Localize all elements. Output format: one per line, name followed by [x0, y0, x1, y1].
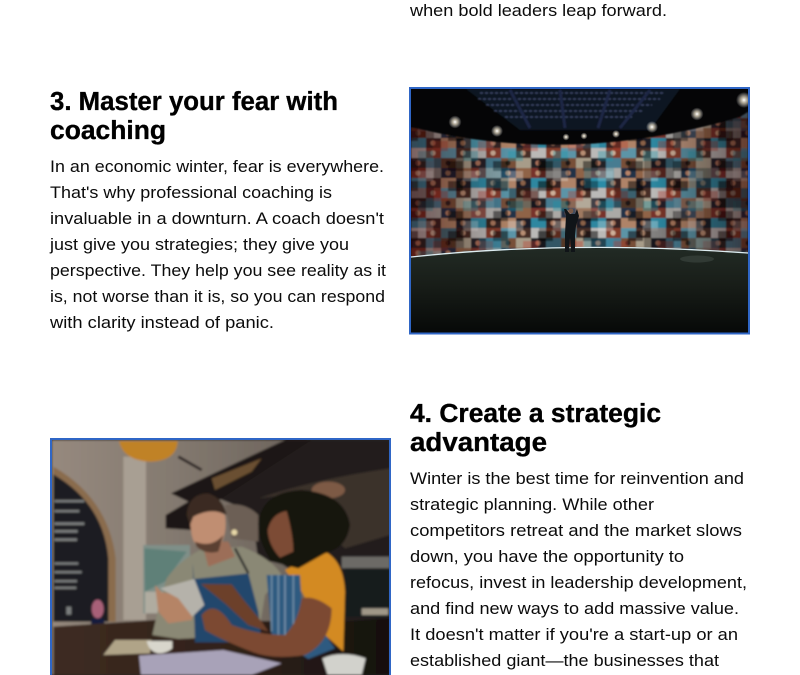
text block: section 4 body: strategic planning. While other: [410, 496, 655, 514]
woman forearm and hand: [202, 598, 332, 657]
text block: section 4 body: competitors retreat and the market slows: [410, 522, 742, 540]
text block: section 4 body: established giant—the businesses that: [410, 652, 719, 670]
cafe wall: [52, 440, 306, 675]
tablet: [160, 579, 204, 617]
text block: section 3 body: [49, 158, 386, 332]
floor: [411, 248, 748, 322]
heading: section 3: coaching: [50, 117, 166, 145]
text block: section 3 body: with clarity instead of panic.: [49, 314, 274, 332]
glowing wall edge: [411, 247, 748, 257]
photo: speaker in front of curved video wall: [410, 88, 752, 334]
text: closing line of previous section: when bold leaders leap forward.: [409, 2, 667, 20]
wall shelf: [166, 440, 312, 530]
floor disc: [680, 256, 714, 262]
heading: section 4: advantage: [410, 429, 547, 457]
cups: [147, 641, 172, 653]
man hand: [155, 585, 193, 623]
text block: section 4 body: refocus, invest in leadership development,: [410, 574, 747, 592]
text block: section 4 body: Winter is the best time for reinvention and: [410, 470, 744, 488]
text block: section 4 body: down, you have the opportunity to: [410, 548, 684, 566]
woman apron: [267, 575, 335, 659]
man shirt: [152, 547, 282, 639]
man apron: [193, 563, 262, 642]
text block: section 3 body: invaluable in a downturn. A coach doesn't: [50, 210, 384, 228]
spot lights: [448, 92, 752, 140]
heading: section 4: [410, 400, 661, 457]
heading: section 3: 3. Master your fear with: [50, 88, 338, 116]
dark back bar: [220, 440, 389, 624]
text block: section 4 body: and find new ways to add massive value.: [410, 600, 739, 618]
woman hair: [258, 490, 350, 568]
woman shirt: [285, 550, 345, 652]
hanging lamp: [119, 441, 178, 462]
chalkboard arch: [53, 467, 116, 622]
text block: section 3 body: just give you strategies; they give you: [49, 236, 349, 254]
woman pointing arm: [201, 584, 268, 632]
heading: section 4: 4. Create a strategic: [410, 400, 661, 428]
text block: section 3 body: That's why professional coaching is: [50, 184, 332, 202]
wall pillar and painting: [123, 457, 146, 620]
text block: section 3 body: In an economic winter, fear is everywhere.: [50, 158, 384, 176]
heading: section 3: [50, 88, 338, 145]
photo: two cafe owners looking at a tablet: [51, 439, 390, 675]
woman face: [268, 511, 293, 558]
speaker figure: [564, 209, 579, 252]
video wall mosaic: [411, 112, 748, 257]
text block: section 3 body: is, not worse than it is, so you can respond: [50, 288, 385, 306]
bar shelves right: [342, 557, 390, 568]
text block: section 4 body: It doesn't matter if you're a start-up or an: [410, 626, 738, 644]
man neck and face: [202, 542, 235, 567]
text block: section 3 body: perspective. They help you see reality as it: [50, 262, 386, 280]
ceiling lights grid: [466, 89, 680, 130]
text block: section 4 body: [410, 470, 747, 670]
papers on table: [103, 640, 152, 655]
wooden table: [53, 618, 390, 675]
flower pot: [90, 618, 106, 626]
